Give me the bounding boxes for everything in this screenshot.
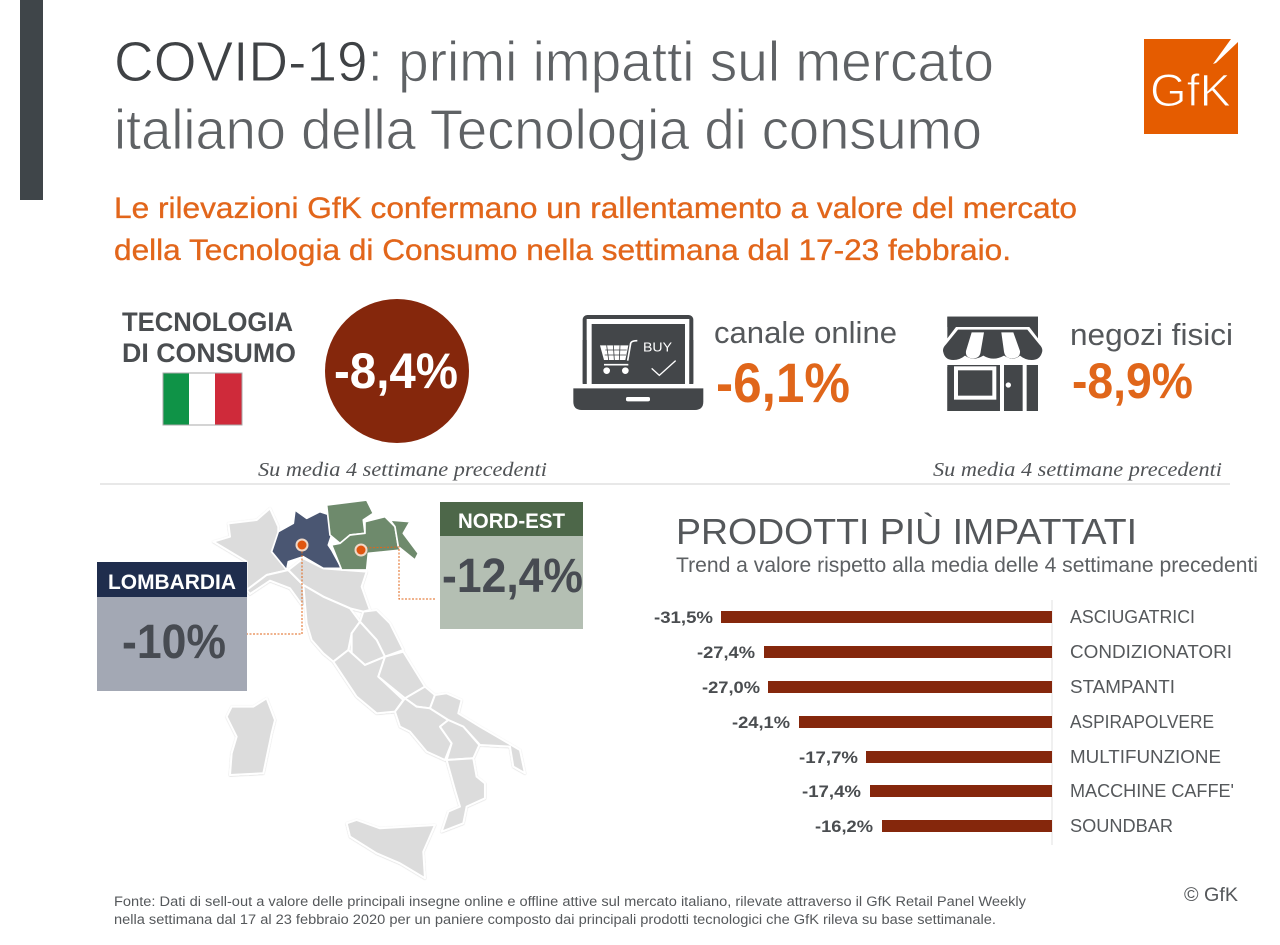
bar: stampanti (702, 677, 1175, 697)
marker: Nord-Est (354, 544, 368, 556)
icon: italian flag (163, 373, 242, 425)
heading: tecnologia di consumo (122, 307, 296, 368)
region: Molise (405, 687, 435, 708)
region: Trentino (327, 500, 373, 543)
heading: products: PRODOTTI PIÙ IMPATTATI (676, 511, 1137, 552)
channel: physical stores: negozi fisici (1070, 317, 1233, 352)
heading: tecnologia di consumo: DI CONSUMO (122, 338, 296, 368)
region: Abruzzo (378, 652, 425, 698)
bar: macchine caffe: -17,4% (802, 782, 861, 801)
title (114, 30, 994, 162)
bar: stampanti: -27,0% (702, 678, 760, 697)
callout: Lombardia (97, 562, 247, 691)
region: Puglia (430, 693, 525, 773)
region: Calabria (442, 758, 485, 832)
national change circle (325, 299, 469, 443)
region: Campania (395, 698, 452, 760)
bar: asciugatrici: ASCIUGATRICI (1070, 607, 1195, 627)
channel: physical stores (1070, 317, 1233, 409)
region: Sicilia (347, 820, 435, 878)
region: Basilicata (440, 720, 479, 760)
title: italiano della Tecnologia di consumo (114, 98, 982, 162)
source note: nella settimana dal 17 al 23 febbraio 2020 per un paniere composto dai principali prodotti tecnologici che GfK rileva su base settimanale. (114, 912, 996, 927)
note: left comparison basis: Su media 4 settimane precedenti (258, 459, 547, 481)
bar: multifunzione: MULTIFUNZIONE (1070, 747, 1221, 767)
region: Lombardia (272, 510, 342, 570)
callout: Nord-Est: -12,4% (442, 550, 583, 603)
icon: laptop with cart: BUY (643, 340, 672, 355)
bar: macchine caffe (802, 781, 1234, 801)
bar chart (654, 600, 1234, 845)
source note (114, 894, 1026, 927)
callout: Nord-Est (440, 502, 583, 629)
connector: Lombardia (246, 545, 302, 634)
bar: asciugatrici: -31,5% (654, 608, 713, 627)
note: right comparison basis: Su media 4 settimane precedenti (933, 459, 1222, 481)
region: Lazio (333, 650, 403, 713)
bar: multifunzione: -17,7% (799, 748, 858, 767)
heading: tecnologia di consumo: TECNOLOGIA (122, 307, 293, 337)
accent bar (20, 0, 43, 200)
subtitle: Le rilevazioni GfK confermano un rallentamento a valore del mercato (114, 192, 1077, 225)
logo: GfK: GfK (1150, 65, 1231, 116)
region: Marche (360, 610, 403, 657)
bar: condizionatori: CONDIZIONATORI (1070, 642, 1232, 662)
bar: multifunzione (799, 747, 1221, 767)
bar: aspirapolvere: -24,1% (732, 713, 790, 732)
icon: laptop with cart (573, 315, 703, 410)
bar: soundbar: SOUNDBAR (1070, 816, 1173, 836)
subtitle (114, 192, 1077, 267)
region: Sardegna (227, 698, 275, 775)
channel: online: -6,1% (716, 351, 850, 414)
subheading: products: Trend a valore rispetto alla media delle 4 settimane precedenti (676, 554, 1258, 577)
bar: macchine caffe: MACCHINE CAFFE' (1070, 781, 1234, 801)
bar: condizionatori: -27,4% (697, 643, 755, 662)
callout: Nord-Est: NORD-EST (458, 510, 565, 533)
subtitle: della Tecnologia di Consumo nella settimana dal 17-23 febbraio. (114, 234, 1011, 267)
callout: Lombardia: LOMBARDIA (108, 571, 236, 594)
copyright: © GfK (1184, 885, 1238, 906)
logo: GfK (1144, 39, 1238, 134)
bar: soundbar: -16,2% (815, 817, 873, 836)
bar: aspirapolvere (732, 712, 1214, 732)
callout: Lombardia: -10% (122, 616, 226, 669)
region: Friuli (390, 520, 418, 560)
region: Toscana (303, 585, 360, 662)
marker: Lombardia (296, 538, 308, 552)
channel: online (714, 315, 897, 414)
map of italy (213, 500, 525, 878)
bar: asciugatrici (654, 607, 1195, 627)
region: Emilia Romagna (288, 558, 370, 612)
bar: aspirapolvere: ASPIRAPOLVERE (1070, 712, 1214, 732)
region: Liguria (247, 570, 308, 607)
region: Piemonte (213, 508, 288, 590)
channel: online: canale online (714, 315, 897, 350)
region: Veneto (332, 517, 402, 570)
bar: condizionatori (697, 642, 1232, 662)
bar: soundbar (815, 816, 1173, 836)
connector: Nord-Est (361, 547, 435, 599)
title: COVID-19: primi impatti sul mercato (114, 30, 994, 94)
icon: store (943, 317, 1042, 411)
bar: stampanti: STAMPANTI (1070, 677, 1175, 697)
national change circle: -8,4% (334, 343, 458, 399)
channel: physical stores: -8,9% (1072, 353, 1193, 409)
region: Umbria (352, 622, 385, 665)
source note: Fonte: Dati di sell-out a valore delle principali insegne online e offline attive sul mercato italiano, rilevate attraverso il GfK Retail Panel Weekly (114, 894, 1026, 909)
